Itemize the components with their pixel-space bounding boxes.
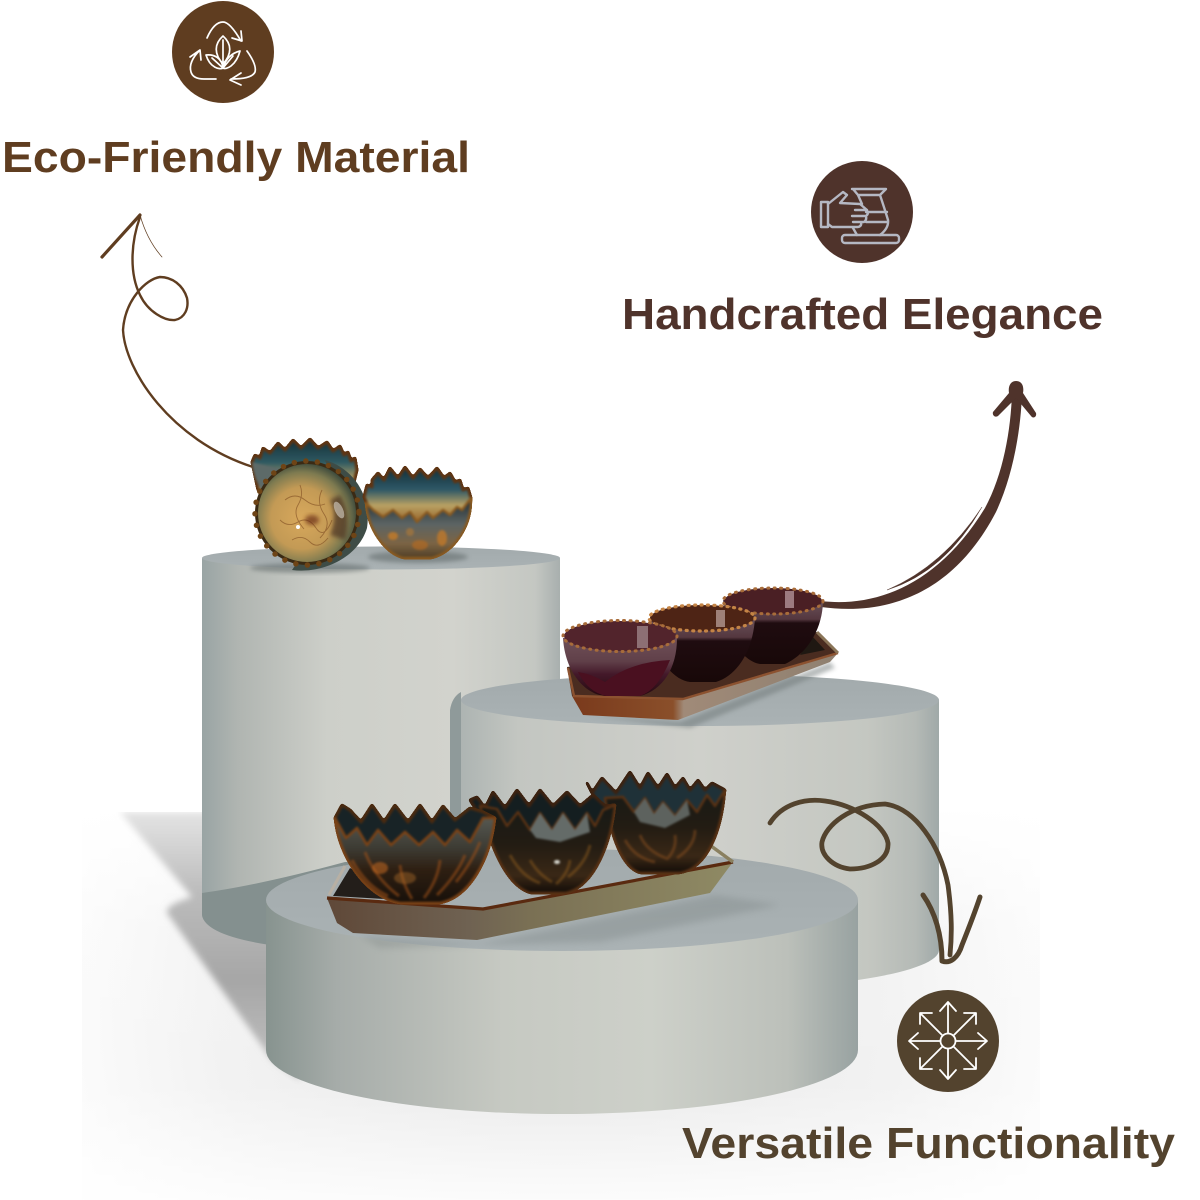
icon: arrows radiating from a circle (897, 990, 999, 1092)
near bowl (563, 620, 677, 696)
arrow: to Handcrafted Elegance (821, 381, 1036, 609)
middle bowl (649, 605, 755, 682)
far bowl (723, 588, 823, 664)
pedestal: front cylinder (266, 849, 858, 1114)
bowls group: purple glaze on tray (563, 588, 838, 728)
right bowl (587, 772, 725, 873)
right bowl (364, 467, 471, 558)
pedestal: middle cylinder (461, 674, 939, 990)
bowl shadows (250, 551, 468, 573)
tilted front bowl (255, 460, 368, 571)
shadow under tray (360, 895, 780, 948)
tray (567, 632, 838, 720)
back bowl (252, 439, 357, 500)
heading: Handcrafted Elegance: Handcrafted Elegance (622, 290, 1103, 339)
arrow: to Eco-Friendly Material (102, 215, 253, 467)
middle bowl (470, 790, 615, 893)
icon: hands on pottery wheel (811, 161, 913, 263)
bowls group: teal and yellow glaze (250, 439, 471, 573)
icon: recycling leaves (172, 1, 274, 103)
shadow under tray (590, 662, 835, 728)
cast shadow (60, 780, 460, 1080)
heading: Versatile Functionality: Versatile Functionality (682, 1119, 1176, 1168)
pedestal: tall cylinder (202, 546, 560, 950)
left bowl (335, 805, 495, 903)
bowls group: dark glaze on tray (327, 772, 780, 948)
heading: Eco-Friendly Material: Eco-Friendly Material (2, 133, 470, 182)
tray (327, 843, 733, 940)
floor backdrop (82, 812, 1040, 1200)
arrow: to Versatile Functionality (770, 800, 980, 962)
